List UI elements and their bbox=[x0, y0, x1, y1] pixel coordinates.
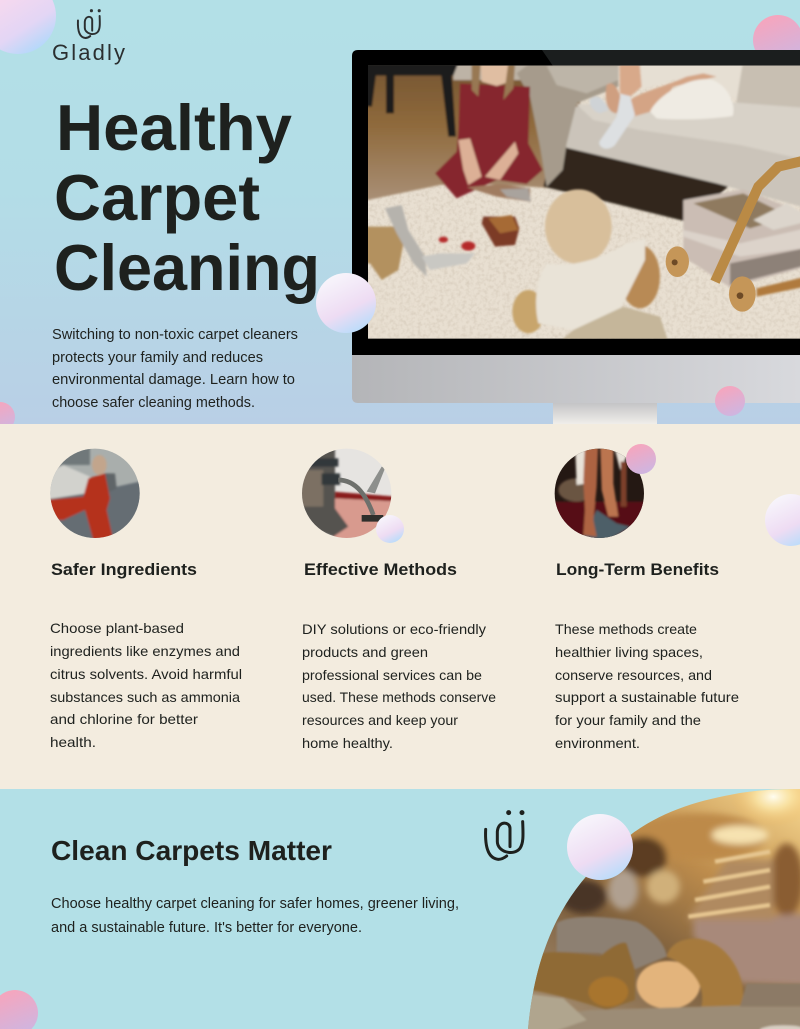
body text: These methods create bbox=[555, 621, 697, 637]
monitor bbox=[352, 50, 800, 424]
decorative sphere: photo edge bbox=[567, 814, 633, 880]
body text: health. bbox=[50, 734, 96, 750]
logo: Gladly bbox=[52, 10, 125, 65]
decorative sphere: monitor corner bbox=[316, 273, 376, 333]
decorative sphere: right edge bbox=[765, 494, 800, 546]
body text: and a sustainable future. It's better for everyone. bbox=[51, 920, 362, 936]
body text: Choose healthy carpet cleaning for safer homes, greener living, bbox=[51, 896, 459, 912]
body text bbox=[302, 621, 496, 751]
intro text bbox=[52, 327, 298, 411]
body text: conserve resources, and bbox=[555, 667, 712, 683]
body text: home healthy. bbox=[302, 735, 393, 751]
photo: woman on sofa bbox=[50, 448, 140, 538]
intro text: environmental damage. Learn how to bbox=[52, 372, 295, 388]
body text: citrus solvents. Avoid harmful bbox=[50, 666, 242, 682]
decorative sphere: on monitor chin bbox=[715, 386, 745, 416]
decorative sphere: left edge bbox=[0, 402, 15, 432]
decorative sphere: vacuum photo bbox=[376, 515, 404, 543]
decorative sphere: top left bbox=[0, 0, 56, 54]
decorative sphere: bottom left bbox=[0, 990, 38, 1029]
title bbox=[54, 91, 320, 304]
monitor stand bbox=[553, 403, 657, 424]
photo: bare feet on rug bbox=[554, 448, 644, 538]
photo: child sleeping with cat bbox=[528, 789, 800, 1029]
body text bbox=[555, 621, 739, 751]
icon: Gladly logo mark bbox=[486, 812, 523, 859]
body text: products and green bbox=[302, 644, 428, 660]
photo: children playing on a carpet bbox=[368, 66, 800, 339]
monitor bezel bbox=[352, 50, 800, 355]
panel: three benefits bbox=[0, 424, 800, 789]
body text: for your family and the bbox=[555, 712, 701, 728]
body text: support a sustainable future bbox=[555, 689, 739, 705]
title: Carpet bbox=[54, 161, 260, 234]
title: Healthy bbox=[56, 91, 292, 164]
body text: substances such as ammonia bbox=[50, 689, 240, 705]
body text: and chlorine for better bbox=[50, 711, 198, 727]
body text: used. These methods conserve bbox=[302, 689, 496, 705]
logo: Gladly: Gladly bbox=[52, 40, 125, 65]
heading: Safer Ingredients bbox=[51, 560, 197, 579]
column: long-term benefits bbox=[547, 443, 739, 751]
monitor chin bbox=[352, 350, 800, 403]
header background bbox=[0, 0, 800, 424]
body text: environment. bbox=[555, 735, 640, 751]
decorative sphere: top right bbox=[753, 15, 800, 65]
bezel glare bbox=[542, 50, 800, 66]
intro text: choose safer cleaning methods. bbox=[52, 395, 255, 411]
body text: resources and keep your bbox=[302, 712, 458, 728]
intro text: Switching to non-toxic carpet cleaners bbox=[52, 327, 298, 343]
intro text: protects your family and reduces bbox=[52, 350, 263, 366]
column: effective methods bbox=[295, 443, 496, 751]
body text: ingredients like enzymes and bbox=[50, 643, 240, 659]
body text: DIY solutions or eco-friendly bbox=[302, 621, 486, 637]
body text bbox=[51, 896, 459, 936]
column: safer ingredients bbox=[43, 443, 242, 750]
body text: Choose plant-based bbox=[50, 620, 184, 636]
body text: healthier living spaces, bbox=[555, 644, 703, 660]
heading: Long-Term Benefits bbox=[556, 560, 719, 579]
body text bbox=[50, 620, 242, 750]
title: Cleaning bbox=[54, 231, 320, 304]
heading: Effective Methods bbox=[304, 560, 457, 579]
body text: professional services can be bbox=[302, 667, 482, 683]
photo: vacuum cleaner bbox=[302, 448, 392, 538]
panel: clean carpets matter bbox=[0, 767, 800, 1029]
decorative sphere: feet photo bbox=[626, 444, 656, 474]
heading: Clean Carpets Matter bbox=[51, 835, 332, 866]
